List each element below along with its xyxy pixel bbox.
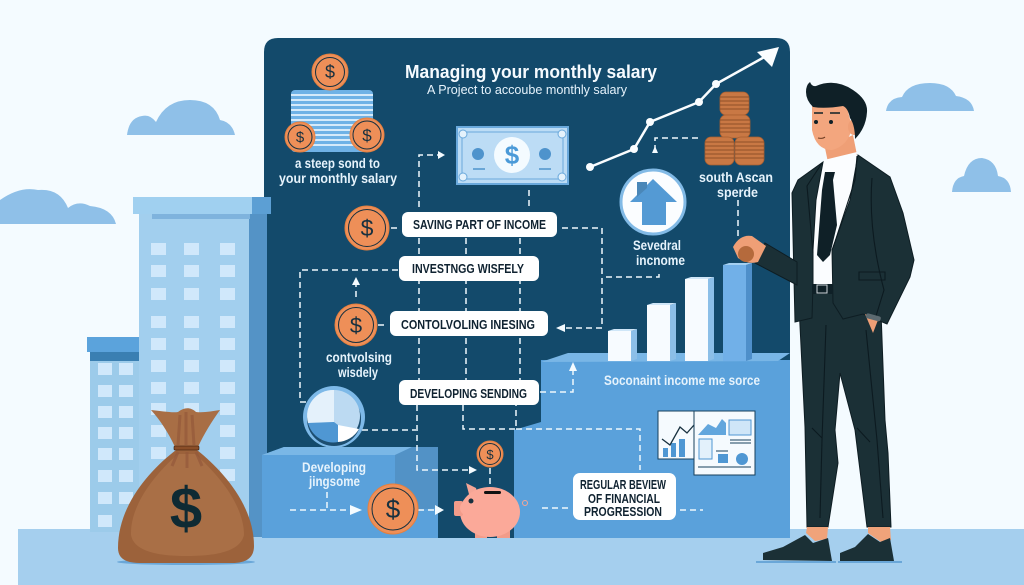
text: south Ascan: south Ascan [699,170,773,185]
text: developing income: jingsome [308,474,360,489]
icon: banknote: $ [505,140,520,170]
icon: piggy bank [454,468,528,538]
coin: bottom [368,484,418,534]
text: several income: incnome [636,253,685,268]
eyebrows [814,112,840,114]
icon: coin stack with coins: $ [325,62,335,82]
icon: money bag [117,408,255,565]
label: saving part of income: SAVING PART OF INCOME [413,217,546,232]
belt buckle [817,285,827,293]
coin: saving [345,206,389,250]
watch [865,313,881,322]
trousers [798,285,891,527]
text: south Ascan: sperde [717,185,758,200]
neck [825,135,857,172]
label: investing wisely: INVESTNGG WISFELY [412,261,524,276]
cloud: top left [127,100,235,135]
label: regular review: OF FINANCIAL [588,491,660,506]
label: controlling: CONTOLVOLING INESING [401,317,535,332]
label: regular review: PROGRESSION [584,504,662,519]
icon: coin stack with coins: $ [296,129,305,146]
text: controlling wisely: contvolsing [326,350,392,365]
cloud: right [952,158,1011,192]
coin: saving: $ [361,215,374,241]
label: regular review: REGULAR BEVIEW [580,477,667,492]
icon: house [621,170,685,234]
left arm [755,243,797,285]
left shoe [763,535,832,561]
shoe shadows [756,561,902,563]
ear [848,119,860,135]
step block: left [262,447,438,538]
text: developing income [302,460,366,489]
hand with coin [733,236,766,263]
coin: above piggy bank: $ [486,447,494,462]
label: controlling [390,311,548,336]
icon: report charts [658,411,755,475]
icon: money bag: $ [170,476,202,541]
building: small [87,337,139,532]
dashed flow connectors [290,138,738,515]
person: businessman [733,82,914,562]
jacket right panel and arm [832,155,914,324]
right eye [829,120,833,124]
smile [818,137,825,138]
text: steep send [279,156,397,186]
left eye [814,120,818,124]
title: Managing your monthly salary [405,62,657,82]
cloud: lower left [0,189,116,224]
text: steep send: a steep sond to [295,156,380,171]
coin: controlling: $ [350,313,362,338]
jacket left panel [792,162,823,322]
text: south Ascan [699,170,773,200]
text: developing income: Developing [302,460,366,475]
bar chart [608,263,752,361]
label: investing wisely [399,256,539,281]
right ankle [868,527,891,542]
panel: main dark board [264,38,790,538]
icon: coin stack with coins [285,54,384,152]
icon: pie chart [303,386,365,448]
hair [806,82,867,139]
coin: controlling [335,304,377,346]
icon: copper coin stacks [705,92,764,165]
text: steep send: your monthly salary [279,171,397,186]
jacket lines [807,156,885,316]
coin: above piggy bank [477,441,503,467]
ground [18,529,1024,585]
tie [817,172,837,262]
text: controlling wisely: wisdely [337,365,378,380]
shirt [811,152,857,284]
pocket hand [865,314,878,333]
text: controlling wisely [326,350,392,380]
icon: banknote [457,127,568,184]
label: regular review [573,473,676,520]
label: saving part of income [402,212,557,237]
coin: bottom: $ [386,494,401,524]
icon: coin stack with coins: $ [362,126,372,145]
trouser creases [812,325,883,518]
left ankle [806,527,828,541]
label: developing spending: DEVELOPING SENDING [410,386,527,401]
step block: right [514,353,790,538]
subtitle: A Project to accoube monthly salary [427,82,627,97]
held coin [738,246,754,262]
face [812,103,852,150]
right shoe [840,534,894,561]
building: large [133,197,271,537]
belt [812,284,833,294]
cloud: top right [886,83,974,111]
text: several income [633,238,685,268]
text: secondary income: Soconaint income me sorce [604,373,760,388]
label: developing spending [399,380,539,405]
line chart: rising arrow [586,47,779,171]
text: several income: Sevedral [633,238,681,253]
